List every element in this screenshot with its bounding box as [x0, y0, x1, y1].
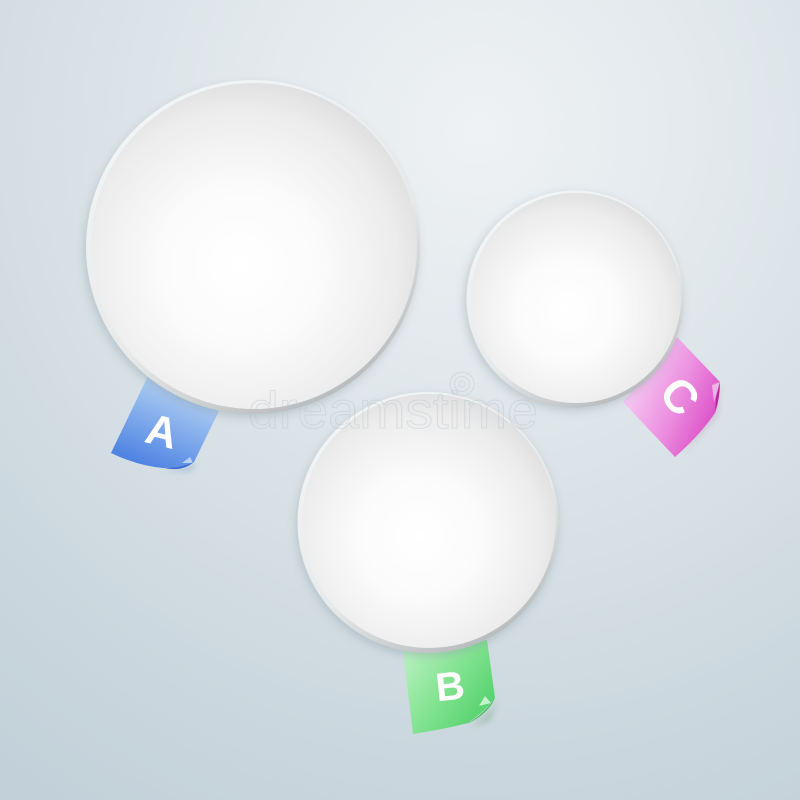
watermark — [248, 372, 538, 440]
circle A — [85, 80, 420, 417]
circle B — [297, 392, 558, 656]
letter B: B — [433, 664, 467, 710]
letter A: A — [141, 405, 183, 459]
letter C: C — [650, 366, 710, 426]
circle C — [465, 190, 684, 410]
watermark word: dreamstime — [248, 382, 538, 440]
tag B — [403, 640, 498, 734]
curled corner B — [479, 696, 491, 706]
tag A — [111, 376, 219, 472]
tag C — [623, 337, 722, 457]
watermark spiral icon — [450, 372, 474, 396]
curled corner A — [182, 457, 193, 463]
curled corner C — [712, 382, 720, 402]
